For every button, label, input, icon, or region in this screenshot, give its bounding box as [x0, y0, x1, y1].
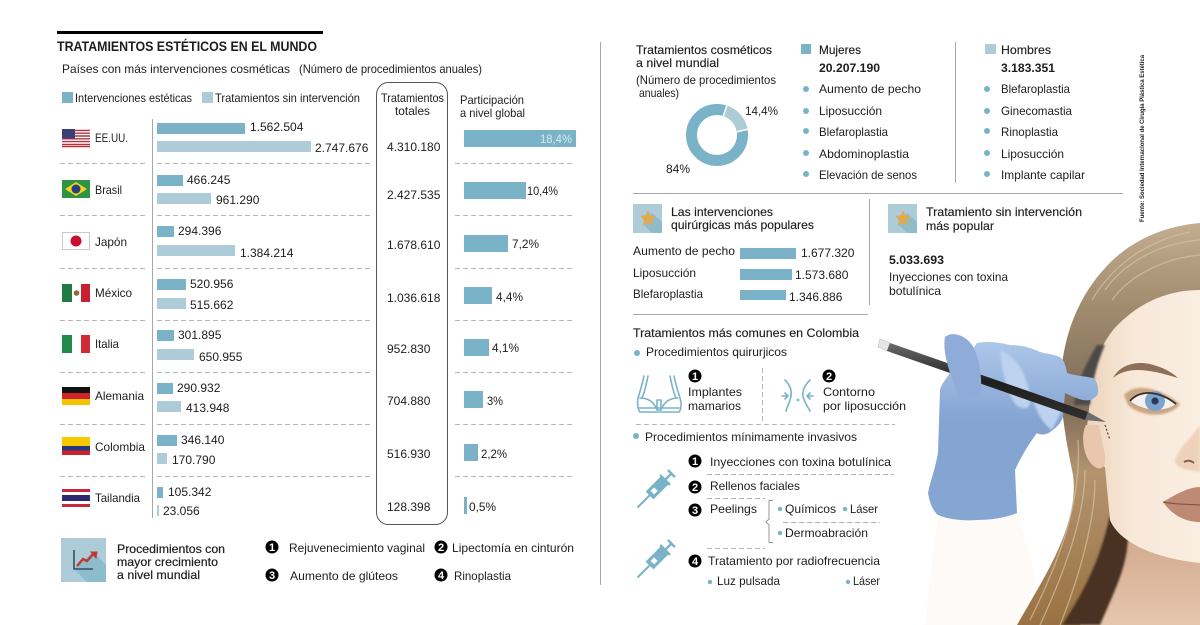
totals heading: totales	[395, 104, 430, 118]
row: EE.UU.: 4.310.180	[387, 140, 441, 154]
list: women: Mujeres	[819, 43, 861, 57]
list: minimally invasive procedures: Láser	[850, 502, 878, 516]
list: women: Liposucción	[819, 104, 882, 118]
row: Brasil	[62, 173, 558, 207]
list: minimally invasive procedures: 1	[692, 456, 698, 468]
heading: Colombia: Tratamientos más comunes en Colombia	[633, 326, 859, 340]
subheading: surgical procedures: Procedimientos quirurjicos	[646, 345, 787, 359]
implant item	[688, 370, 742, 413]
row: Italia: Italia	[95, 337, 119, 351]
heading: fastest-growing procedures: mayor crecimiento	[117, 555, 218, 569]
fastest-growing list: Rejuvenecimiento vaginal	[289, 541, 425, 555]
fastest-growing list: 1	[269, 542, 275, 554]
icon: syringe	[633, 469, 676, 512]
heading: worldwide cosmetic treatments: a nivel mundial	[636, 56, 719, 70]
liposuction item: por liposucción	[823, 399, 906, 413]
legend: Intervenciones estéticas	[75, 91, 192, 105]
bar chart: popular surgeries: Aumento de pecho	[633, 244, 735, 258]
participation heading	[460, 93, 525, 120]
flag: Colombia	[62, 437, 90, 455]
row: Colombia: 346.140	[181, 433, 225, 447]
row: México: 515.662	[190, 298, 234, 312]
row: Italia: 301.895	[178, 328, 222, 342]
row: EE.UU.: 18,4%	[540, 132, 572, 146]
row: Alemania: 290.932	[177, 381, 221, 395]
participation heading: a nivel global	[460, 106, 525, 120]
list: women	[801, 43, 921, 182]
row: Japón: Japón	[95, 235, 127, 249]
list: women: Aumento de pecho	[819, 82, 921, 96]
flag: Brazil	[62, 180, 90, 198]
row: Colombia: 2,2%	[481, 447, 507, 461]
donut chart	[666, 104, 778, 176]
list: minimally invasive procedures: Inyecciones con toxina botulínica	[710, 455, 891, 469]
legend	[62, 91, 360, 105]
glove	[928, 342, 1098, 520]
row: México	[62, 277, 523, 312]
icon: growth chart	[61, 538, 106, 582]
fastest-growing list: 4	[438, 570, 445, 582]
row: Alemania	[62, 381, 503, 415]
row: Colombia	[62, 433, 507, 467]
list: women: Elevación de senos	[819, 168, 917, 182]
row: Alemania: Alemania	[95, 389, 144, 403]
liposuction item: 2	[826, 371, 832, 383]
row: Italia: 4,1%	[492, 341, 519, 355]
legend: Tratamientos sin intervención	[215, 91, 360, 105]
row: Tailandia	[62, 485, 496, 518]
row: Alemania: 3%	[487, 394, 503, 408]
row: Brasil: 466.245	[187, 173, 231, 187]
implant item: 1	[692, 371, 698, 383]
heading: popular non-surgical treatment: Tratamiento sin intervención	[926, 205, 1082, 219]
bar chart: popular surgeries: Blefaroplastia	[633, 287, 703, 301]
row: Japón: 1.384.214	[240, 246, 294, 260]
bar chart: popular surgeries: 1.573.680	[795, 268, 849, 282]
bar chart: popular surgeries: Liposucción	[633, 266, 696, 280]
flag: Japan	[62, 232, 90, 250]
list: minimally invasive procedures: Químicos	[785, 502, 836, 516]
flag: Italy	[62, 335, 90, 353]
subtitle: Países con más intervenciones cosméticas	[62, 62, 290, 76]
callout: botulinum toxin: botulínica	[889, 284, 941, 298]
subtitle	[62, 62, 482, 76]
list: minimally invasive procedures: 4	[692, 556, 699, 568]
row: Tailandia: 128.398	[387, 500, 431, 514]
row: Brasil: 10,4%	[527, 184, 558, 198]
thumb	[944, 334, 981, 400]
lips	[1163, 487, 1200, 522]
row: EE.UU.	[62, 120, 576, 155]
row: Tailandia: Tailandia	[95, 491, 140, 505]
photo: woman with gloved hand marking her face	[878, 223, 1200, 625]
row: Japón: 294.396	[178, 224, 222, 238]
row: Colombia: 170.790	[172, 453, 216, 467]
row: Tailandia: 23.056	[163, 504, 200, 518]
list: minimally invasive procedures: Rellenos faciales	[710, 479, 800, 493]
row: Japón: 1.678.610	[387, 238, 441, 252]
heading: popular surgical interventions: quirúrgicas más populares	[671, 218, 814, 232]
flag: Germany	[62, 387, 90, 405]
bar chart: popular surgeries: 1.346.886	[789, 290, 843, 304]
icon: torso contour	[782, 380, 813, 411]
donut chart: 14,4%	[745, 104, 778, 118]
flag: Mexico	[62, 284, 90, 302]
eyebrow	[1113, 363, 1178, 378]
row: México: 4,4%	[496, 290, 523, 304]
fastest-growing list	[266, 540, 574, 583]
fastest-growing list: Lipectomía en cinturón	[452, 541, 574, 555]
heading: worldwide cosmetic treatments: (Número de procedimientos	[636, 73, 776, 87]
row: EE.UU.: 1.562.504	[250, 120, 304, 134]
list: women: Blefaroplastia	[819, 125, 888, 139]
heading: popular surgical interventions	[671, 205, 814, 232]
row: Brasil: Brasil	[95, 183, 122, 197]
list: minimally invasive procedures	[688, 454, 891, 588]
row: Alemania: 704.880	[387, 394, 431, 408]
participation heading: Participación	[460, 93, 524, 107]
row: Italia: 952.830	[387, 342, 431, 356]
row: EE.UU.: 2.747.676	[315, 141, 369, 155]
row: México: México	[95, 286, 132, 300]
fastest-growing list: 3	[269, 570, 275, 582]
heading: worldwide cosmetic treatments	[636, 43, 776, 100]
icon: star	[633, 204, 662, 233]
list: women: Abdominoplastia	[819, 147, 909, 161]
fastest-growing list: 2	[438, 542, 444, 554]
totals heading: Tratamientos	[381, 91, 444, 105]
heading: fastest-growing procedures: a nivel mundial	[117, 568, 200, 582]
callout: botulinum toxin	[889, 253, 1008, 298]
row: Alemania: 413.948	[186, 401, 230, 415]
list: minimally invasive procedures: Dermoabración	[785, 526, 868, 540]
row: EE.UU.: EE.UU.	[95, 131, 128, 145]
implant item: mamarios	[688, 399, 741, 413]
heading: fastest-growing procedures: Procedimientos con	[117, 542, 225, 556]
title: TRATAMIENTOS ESTÉTICOS EN EL MUNDO	[57, 38, 317, 54]
totals column box	[376, 82, 448, 524]
row: Italia: 650.955	[199, 350, 243, 364]
list: men: Rinoplastia	[1001, 125, 1058, 139]
row: Brasil: 2.427.535	[387, 188, 441, 202]
totals heading	[381, 91, 444, 118]
list: men	[984, 43, 1085, 182]
row: Brasil: 961.290	[216, 193, 260, 207]
nose	[1175, 425, 1200, 472]
source note: Fuente: Sociedad Internacional de Cirugía Plástica Estética	[1139, 55, 1146, 222]
list: women: 20.207.190	[819, 61, 880, 75]
heading: fastest-growing procedures	[117, 542, 225, 582]
list: minimally invasive procedures: Peelings	[710, 502, 757, 516]
list: minimally invasive procedures: Luz pulsada	[717, 574, 780, 588]
list: minimally invasive procedures: Tratamiento por radiofrecuencia	[708, 554, 880, 568]
eye	[1124, 388, 1180, 415]
list: men: Implante capilar	[1001, 168, 1085, 182]
callout: botulinum toxin: 5.033.693	[889, 253, 944, 267]
row: Tailandia: 105.342	[168, 485, 212, 499]
row: México: 1.036.618	[387, 291, 441, 305]
list: minimally invasive procedures: 3	[692, 505, 698, 517]
list: men: Hombres	[1001, 43, 1051, 57]
liposuction item	[822, 370, 906, 413]
heading: popular surgical interventions: Las intervenciones	[671, 205, 773, 219]
callout: botulinum toxin: Inyecciones con toxina	[889, 270, 1008, 284]
subtitle: (Número de procedimientos anuales)	[299, 62, 482, 76]
row: Colombia: Colombia	[95, 440, 145, 454]
flag: Thailand	[62, 489, 90, 507]
row: Japón	[62, 224, 539, 260]
icon: bra	[638, 376, 681, 412]
list: minimally invasive procedures: Láser	[853, 574, 880, 588]
row: Tailandia: 0,5%	[469, 500, 496, 514]
subheading: minimally invasive: Procedimientos mínimamente invasivos	[645, 430, 857, 444]
row: México: 520.956	[190, 277, 234, 291]
heading: popular non-surgical treatment	[926, 205, 1082, 233]
flag: USA	[62, 129, 90, 147]
heading: popular non-surgical treatment: más popular	[926, 219, 994, 233]
implant item: Implantes	[688, 385, 742, 399]
pencil	[878, 339, 1106, 422]
list: men: Ginecomastia	[1001, 104, 1072, 118]
liposuction item: Contorno	[823, 385, 875, 399]
list: men: Blefaroplastia	[1001, 82, 1070, 96]
list: men: 3.183.351	[1001, 61, 1055, 75]
heading: worldwide cosmetic treatments: Tratamientos cosméticos	[636, 43, 772, 57]
donut chart: 84%	[666, 162, 690, 176]
fastest-growing list: Rinoplastia	[454, 569, 511, 583]
bar chart: popular surgeries: 1.677.320	[801, 246, 855, 260]
row: Japón: 7,2%	[512, 237, 539, 251]
title rule	[57, 31, 323, 34]
list: minimally invasive procedures: 2	[692, 482, 698, 494]
fastest-growing list: Aumento de glúteos	[290, 569, 398, 583]
icon: syringe	[633, 539, 676, 582]
bar chart: popular surgeries	[633, 244, 855, 304]
row: Italia	[62, 328, 519, 364]
row: Colombia: 516.930	[387, 447, 431, 461]
icon: star	[888, 204, 917, 233]
heading: worldwide cosmetic treatments: anuales)	[639, 86, 679, 100]
list: men: Liposucción	[1001, 147, 1064, 161]
